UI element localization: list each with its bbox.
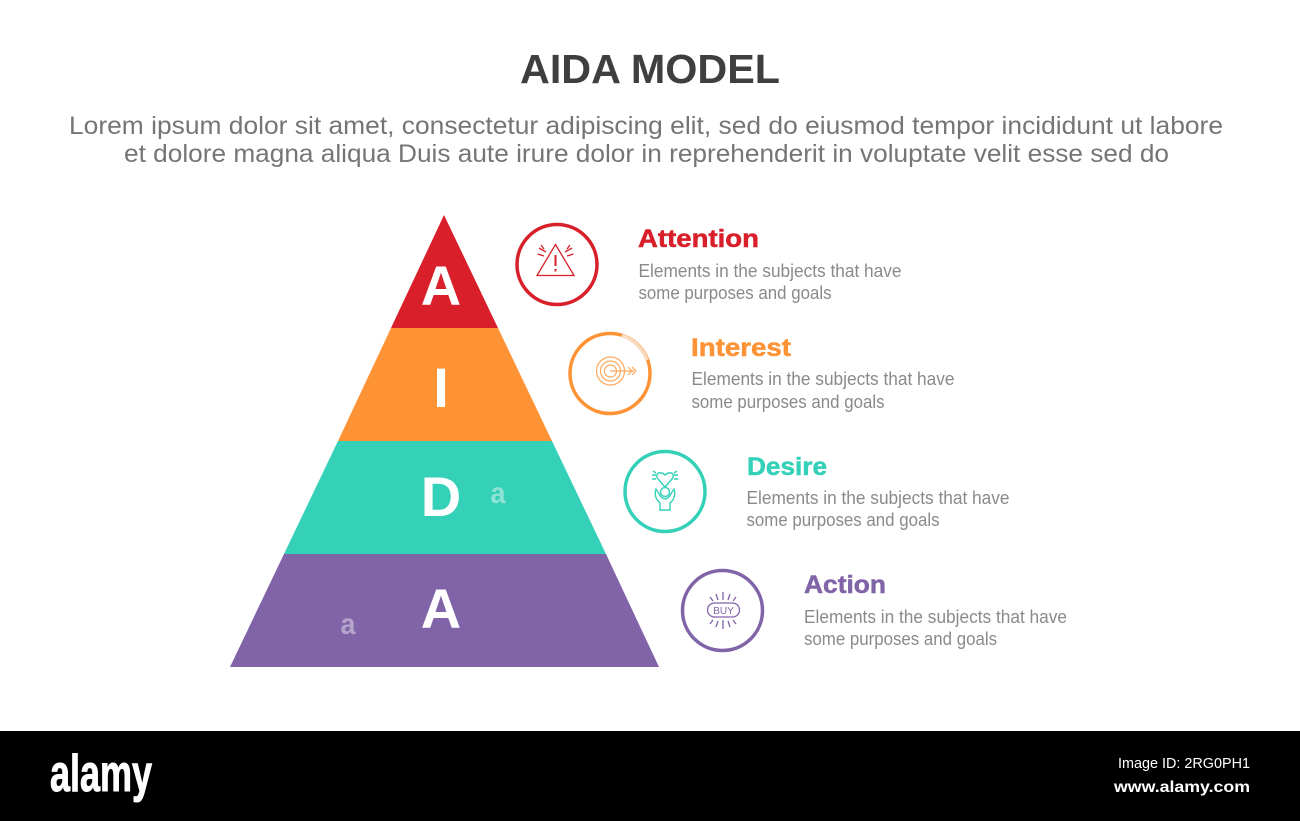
description: attention: some purposes and goals xyxy=(638,283,832,303)
icon: buy button in circle xyxy=(682,570,762,650)
pyramid layer: A attention: A xyxy=(421,254,461,317)
footer website: www.alamy.com xyxy=(1113,779,1250,796)
pyramid layer: A attention xyxy=(391,215,498,328)
pyramid layer: A action: a xyxy=(340,608,356,641)
description: action: some purposes and goals xyxy=(804,629,997,649)
heading: attention: Attention xyxy=(638,225,759,253)
pyramid layer: D desire xyxy=(284,441,606,554)
item: desire xyxy=(625,452,1010,532)
pyramid layer: D desire: a xyxy=(490,477,506,510)
icon: hands holding heart in circle xyxy=(625,452,705,532)
heading: desire: Desire xyxy=(747,453,827,481)
heading: action: Action xyxy=(804,571,886,599)
description: interest: some purposes and goals xyxy=(692,392,884,412)
footer image id: Image ID: 2RG0PH1 xyxy=(1118,755,1250,772)
description: desire xyxy=(746,488,1010,530)
description: action: Elements in the subjects that have xyxy=(804,607,1067,627)
pyramid layer: D desire: D xyxy=(421,465,461,528)
item: interest xyxy=(570,334,954,414)
pyramid layer: I interest xyxy=(338,328,552,441)
description: interest: Elements in the subjects that have xyxy=(692,369,954,389)
pyramid chart xyxy=(230,215,659,667)
footer bar xyxy=(0,731,1300,821)
description: desire: some purposes and goals xyxy=(746,510,940,530)
description: desire: Elements in the subjects that have xyxy=(746,488,1010,508)
item: attention xyxy=(517,224,902,304)
icon: target with arrow in circle xyxy=(570,334,650,414)
description: action xyxy=(804,607,1067,649)
subtitle text xyxy=(69,112,1223,168)
title: AIDA MODEL xyxy=(520,46,780,92)
description: attention xyxy=(638,261,902,303)
pyramid layer: I interest: I xyxy=(433,356,449,419)
pyramid layer: A action xyxy=(230,554,659,667)
heading: interest: Interest xyxy=(691,334,792,362)
icon: buy button in circle: BUY xyxy=(713,606,734,617)
description: interest xyxy=(692,369,954,412)
item: action xyxy=(682,570,1067,650)
subtitle text: Lorem ipsum dolor sit amet, consectetur adipiscing elit, sed do eiusmod tempor incididunt ut labore xyxy=(69,112,1223,140)
subtitle text: et dolore magna aliqua Duis aute irure dolor in reprehenderit in voluptate velit esse sed do xyxy=(124,140,1169,168)
description: attention: Elements in the subjects that have xyxy=(638,261,902,281)
icon: warning triangle in circle xyxy=(517,224,597,304)
footer logo: alamy xyxy=(50,745,152,803)
pyramid layer: A action: A xyxy=(421,577,461,640)
